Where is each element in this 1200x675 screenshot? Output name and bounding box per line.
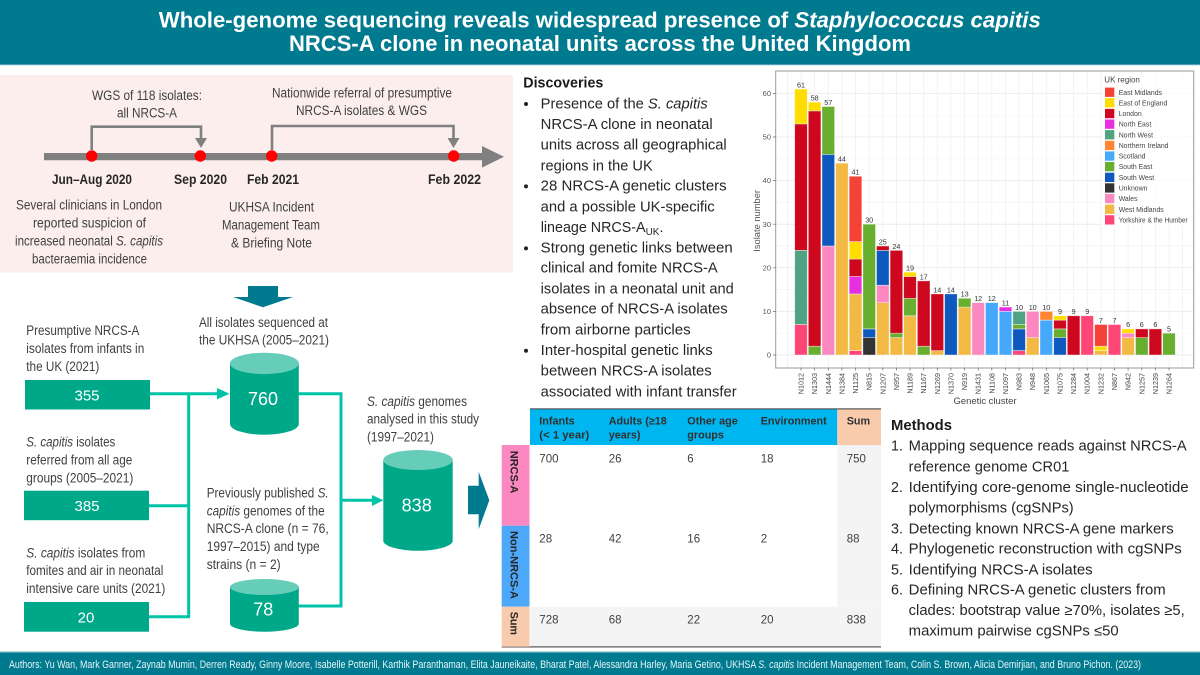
bullet: inter-hospital links: associated with infant transfer bbox=[541, 384, 737, 400]
x axis cluster labels: N1444 bbox=[824, 373, 833, 394]
table row: NRCS-A values: 750 bbox=[847, 453, 866, 465]
bar: N1444 bbox=[822, 106, 835, 355]
table row: Non-NRCS-A values: 28 bbox=[539, 534, 552, 546]
bullet: genetic clusters: 28 NRCS-A genetic clusters bbox=[541, 179, 727, 195]
bar: N1303 bbox=[808, 102, 821, 355]
bullet: presence across the UK bbox=[524, 96, 727, 174]
bullet: fomite links bbox=[524, 241, 734, 338]
text: WGS of 118 isolates: all NRCS-A bbox=[117, 106, 177, 121]
x axis cluster labels: N1384 bbox=[837, 373, 846, 394]
table header: Adults (≥18 bbox=[609, 416, 667, 428]
bar value labels: 25 bbox=[879, 237, 887, 246]
box: 355 isolates: 355 bbox=[74, 387, 100, 404]
bar: N1257 bbox=[1136, 329, 1148, 355]
bullet: genetic clusters bbox=[524, 179, 727, 238]
bar: N1264 bbox=[1163, 333, 1175, 355]
arrow: nationwide referral bracket bbox=[272, 126, 460, 150]
text: all isolates sequenced bbox=[199, 315, 329, 348]
legend: UK region: Yorkshire & the Humber bbox=[1119, 217, 1188, 224]
text: referred isolates: groups (2005–2021) bbox=[26, 470, 133, 485]
bar: N1004 bbox=[1081, 316, 1094, 355]
bar: N867 bbox=[1108, 324, 1121, 355]
table row: NRCS-A values: 26 bbox=[609, 453, 621, 465]
text: clinicians' suspicion: increased neonatal S. capitis bbox=[15, 233, 163, 248]
table row: Sum values: 838 bbox=[847, 614, 866, 626]
method step 5: Identifying NRCS-A isolates bbox=[909, 562, 1093, 578]
table header: years) bbox=[609, 429, 641, 441]
x axis cluster labels: N1125 bbox=[851, 373, 860, 394]
text: presumptive isolates bbox=[26, 323, 144, 374]
x axis title: Genetic cluster bbox=[954, 396, 1016, 407]
text: genomes analysed bbox=[367, 394, 479, 445]
title: Whole-genome sequencing reveals widespread presence of Staphylococcus capitis bbox=[159, 8, 1041, 32]
bar: N1065 bbox=[1040, 311, 1053, 355]
text: UKHSA incident team: & Briefing Note bbox=[231, 235, 312, 250]
panel: sample workflow bbox=[24, 315, 479, 632]
bullet: presence across the UK: Presence of the S. capitis bbox=[541, 96, 708, 112]
table row: Non-NRCS-A values bbox=[539, 534, 859, 546]
text: discoveries bbox=[523, 75, 737, 400]
method step 6: Defining NRCS-A genetic clusters from bbox=[909, 583, 1166, 599]
text: UKHSA incident team: UKHSA Incident bbox=[229, 200, 314, 215]
bar value labels: 41 bbox=[852, 168, 860, 177]
bullet: presence across the UK: regions in the UK bbox=[541, 158, 653, 174]
text: clinicians' suspicion bbox=[15, 197, 163, 266]
text: genomes analysed: analysed in this study bbox=[367, 412, 479, 427]
bar: N1384 bbox=[836, 163, 848, 355]
y axis title: Isolate number bbox=[752, 190, 762, 252]
table row: NRCS-A values: 18 bbox=[761, 453, 773, 465]
x axis cluster labels: N867 bbox=[1110, 373, 1119, 390]
legend: UK region: South West bbox=[1119, 175, 1154, 182]
bar: N815 bbox=[863, 224, 876, 355]
method step 3: 3. bbox=[891, 521, 903, 537]
table row: Non-NRCS-A values: 88 bbox=[847, 534, 859, 546]
text: previously published genomes: capitis genomes of the bbox=[207, 503, 325, 518]
footer: authors bbox=[0, 652, 1200, 675]
x axis cluster labels: N1108 bbox=[987, 373, 996, 394]
bar: N1075 bbox=[1054, 316, 1066, 355]
table row: Sum values: 20 bbox=[761, 614, 773, 626]
text: genomes analysed: (1997–2021) bbox=[367, 430, 434, 445]
bullet: fomite links: isolates in a neonatal unit and bbox=[541, 281, 734, 297]
bullet: inter-hospital links bbox=[524, 343, 737, 400]
bar value labels: 30 bbox=[865, 216, 873, 225]
bar: N1284 bbox=[1067, 316, 1080, 355]
x axis cluster labels: N1284 bbox=[1069, 373, 1078, 394]
x axis cluster labels: N1431 bbox=[974, 373, 983, 394]
legend: UK region: Northern Ireland bbox=[1119, 143, 1169, 150]
bullet: fomite links: from airborne particles bbox=[541, 322, 691, 338]
bar: N1125 bbox=[849, 176, 862, 355]
text: nationwide referral: Nationwide referral of presumptive bbox=[272, 85, 452, 100]
table header: (< 1 year) bbox=[539, 429, 590, 441]
x axis cluster labels: N1167 bbox=[919, 373, 928, 394]
panel: timeline bbox=[0, 75, 513, 272]
icon: database cylinder 760 bbox=[230, 353, 299, 435]
stacked bar chart bbox=[752, 71, 1194, 407]
bar: N1232 bbox=[1095, 324, 1107, 355]
bar value labels: 11 bbox=[1002, 298, 1009, 307]
bar value labels: 57 bbox=[824, 98, 832, 107]
bullet: presence across the UK: NRCS-A clone in neonatal bbox=[541, 117, 713, 133]
legend: UK region: North East bbox=[1119, 122, 1151, 129]
bar: N948 bbox=[1026, 311, 1039, 355]
bar value labels: 6 bbox=[1126, 320, 1130, 329]
method step 6 bbox=[891, 583, 1185, 640]
table row: Sum values: 22 bbox=[687, 614, 700, 626]
method step 2: Identifying core-genome single-nucleotide bbox=[909, 480, 1189, 496]
bar value labels: 6 bbox=[1153, 320, 1157, 329]
bars bbox=[795, 89, 1175, 355]
text: previously published genomes: Previously published S. bbox=[207, 485, 329, 500]
timeline event markers bbox=[86, 150, 459, 162]
icon: database cylinder 78: 78 bbox=[253, 600, 273, 620]
text: referred isolates bbox=[26, 435, 133, 485]
method step 6: maximum pairwise cgSNPs ≤50 bbox=[909, 624, 1119, 640]
bar: N1370 bbox=[945, 294, 957, 355]
text: fomite and air isolates: intensive care units (2021) bbox=[26, 581, 165, 596]
method step 2: polymorphisms (cgSNPs) bbox=[909, 501, 1074, 517]
bar: N1167 bbox=[917, 281, 930, 355]
x axis cluster labels: N919 bbox=[960, 373, 969, 390]
x axis cluster labels: N1012 bbox=[796, 373, 806, 394]
bar: N1189 bbox=[904, 272, 916, 355]
bar value labels: 12 bbox=[974, 294, 982, 303]
timeline date labels: Sep 2020 bbox=[174, 172, 227, 187]
row label: Non-NRCS-A: Non-NRCS-A bbox=[508, 531, 520, 599]
text: all isolates sequenced: the UKHSA (2005–2021) bbox=[199, 333, 329, 348]
y axis tick labels: 0 bbox=[767, 351, 771, 360]
text: referred isolates: referred from all age bbox=[26, 452, 132, 467]
table header: groups bbox=[687, 429, 724, 441]
table: isolates by source and lineage bbox=[502, 408, 881, 648]
bar: N983 bbox=[1013, 311, 1025, 355]
method step 4: 4. bbox=[891, 542, 903, 558]
table row: Non-NRCS-A values: 42 bbox=[609, 534, 621, 546]
x axis cluster labels: N1207 bbox=[878, 373, 887, 394]
text: nationwide referral bbox=[272, 85, 452, 118]
bar value labels: 44 bbox=[838, 155, 846, 164]
text: clinicians' suspicion: reported suspicion of bbox=[33, 215, 146, 230]
method step 2 bbox=[891, 480, 1189, 517]
table header: Infants bbox=[539, 416, 575, 428]
x axis cluster labels: N1269 bbox=[933, 373, 942, 394]
footer: authors: Authors: Yu Wan, Mark Ganner, Zaynab Mumin, Derren Ready, Ginny Moore, Isabelle Potterill, Karthik Paranthaman, Elita Jauneikaite, Bharat Patel, Alessandra Harley, Maria Getino, UKHSA S. capitis Incident Management Team, Colin S. Brown, Alicia Demirjian, and Bruno Pichon. (2023) bbox=[9, 659, 1141, 671]
x axis cluster labels: N1189 bbox=[906, 373, 914, 394]
row label: Sum: Sum bbox=[508, 612, 520, 635]
text: nationwide referral: NRCS-A isolates & WGS bbox=[296, 103, 427, 118]
y axis tick labels: 60 bbox=[763, 89, 771, 98]
bar value labels: 10 bbox=[1042, 303, 1050, 312]
x axis cluster labels: N1303 bbox=[810, 373, 819, 394]
box: 355 isolates bbox=[25, 380, 150, 410]
method step 4: Phylogenetic reconstruction with cgSNPs bbox=[909, 542, 1182, 558]
row label: Sum bbox=[502, 607, 530, 647]
bar: N1097 bbox=[999, 307, 1012, 355]
table header: Environment bbox=[761, 416, 827, 428]
x axis cluster labels: N948 bbox=[1028, 373, 1037, 390]
bar value labels: 9 bbox=[1058, 307, 1062, 316]
y axis tick labels: 30 bbox=[763, 220, 771, 229]
table row: Non-NRCS-A values: 16 bbox=[687, 534, 700, 546]
text: methods bbox=[891, 418, 1189, 640]
bar value labels: 17 bbox=[920, 272, 928, 281]
legend: UK region: London bbox=[1119, 111, 1142, 118]
x axis cluster labels: N1370 bbox=[946, 373, 955, 394]
row label: NRCS-A: NRCS-A bbox=[508, 451, 520, 494]
timeline date labels bbox=[52, 172, 481, 187]
icon: database cylinder 78 bbox=[230, 579, 299, 632]
method step 6: clades: bootstrap value ≥70%, isolates ≥5, bbox=[909, 603, 1185, 619]
legend: UK region: Scotland bbox=[1119, 154, 1146, 161]
bar value labels: 9 bbox=[1085, 307, 1089, 316]
bar: N1012 bbox=[795, 89, 807, 355]
bullet: genetic clusters: . bbox=[659, 220, 663, 236]
table row: NRCS-A values: 6 bbox=[687, 453, 694, 465]
legend: UK region: Wales bbox=[1119, 196, 1138, 203]
bar value labels: 5 bbox=[1167, 325, 1171, 334]
bullet: genetic clusters: UK bbox=[646, 227, 660, 238]
bar: N1108 bbox=[986, 303, 998, 355]
row label: Non-NRCS-A bbox=[502, 526, 530, 607]
bar: N1431 bbox=[972, 303, 984, 355]
arrow: workflow to table bbox=[468, 472, 489, 529]
box: 385 isolates: 385 bbox=[74, 498, 100, 515]
bullet: inter-hospital links: between NRCS-A isolates bbox=[541, 364, 712, 380]
table row: Sum values: 68 bbox=[609, 614, 621, 626]
text: previously published genomes: 1997–2015) and type bbox=[207, 539, 320, 554]
legend: UK region: UK region bbox=[1104, 76, 1140, 85]
table row: Sum values: 728 bbox=[539, 614, 558, 626]
connector lines bbox=[149, 388, 384, 617]
bar: N942 bbox=[1122, 329, 1134, 355]
arrow: WGS of 118 isolates bracket bbox=[92, 127, 207, 150]
legend: UK region: West Midlands bbox=[1119, 207, 1164, 214]
text: clinicians' suspicion: Several clinicians in London bbox=[16, 197, 162, 212]
bar value labels: 14 bbox=[933, 285, 941, 294]
box: 20 isolates bbox=[24, 602, 149, 632]
bar: N1269 bbox=[931, 294, 944, 355]
timeline date labels: Jun–Aug 2020 bbox=[52, 172, 132, 187]
text: previously published genomes: strains (n = 2) bbox=[207, 557, 281, 572]
x axis cluster labels: N1097 bbox=[1001, 373, 1010, 394]
x axis cluster labels: N1065 bbox=[1042, 373, 1051, 394]
text: presumptive isolates: the UK (2021) bbox=[26, 359, 99, 374]
method step 1: reference genome CR01 bbox=[909, 459, 1069, 475]
table header: Sum bbox=[847, 416, 870, 428]
x axis cluster labels: N1239 bbox=[1151, 373, 1160, 394]
table row: NRCS-A values bbox=[539, 453, 866, 465]
method step 3: Detecting known NRCS-A gene markers bbox=[909, 521, 1174, 537]
text: previously published genomes bbox=[207, 485, 329, 572]
x axis cluster labels: N1075 bbox=[1056, 373, 1064, 394]
method step 6: 6. bbox=[891, 583, 903, 599]
bar value labels: 19 bbox=[906, 264, 914, 273]
method step 5: 5. bbox=[891, 562, 903, 578]
text: WGS of 118 isolates bbox=[92, 88, 202, 121]
text: methods: Methods bbox=[891, 418, 952, 434]
bar value labels: 13 bbox=[961, 290, 969, 299]
method step 1: 1. bbox=[891, 439, 903, 455]
text: WGS of 118 isolates: WGS of 118 isolates: bbox=[92, 88, 202, 103]
timeline date labels: Feb 2021 bbox=[247, 172, 299, 187]
bar value labels: 61 bbox=[797, 80, 805, 89]
arrow: timeline axis bbox=[44, 146, 504, 168]
y axis tick labels: 50 bbox=[763, 133, 771, 142]
table header bbox=[539, 416, 870, 441]
table row: Non-NRCS-A values: 2 bbox=[761, 534, 767, 546]
bar value labels: 7 bbox=[1112, 316, 1116, 325]
bar value labels: 14 bbox=[947, 285, 955, 294]
text: presumptive isolates: Presumptive NRCS-A bbox=[26, 323, 139, 338]
icon: database cylinder 838: 838 bbox=[402, 496, 432, 516]
bullet: fomite links: absence of NRCS-A isolates bbox=[541, 302, 728, 318]
y axis tick labels: 20 bbox=[763, 263, 771, 272]
y axis tick labels: 40 bbox=[763, 176, 771, 185]
bar: N1239 bbox=[1149, 329, 1162, 355]
bullet: fomite links: clinical and fomite NRCS-A bbox=[541, 261, 718, 277]
legend: UK region: East of England bbox=[1119, 100, 1168, 107]
y axis tick labels: 10 bbox=[763, 307, 771, 316]
legend: UK region: Unknown bbox=[1119, 186, 1148, 192]
y axis tick labels bbox=[763, 89, 771, 360]
bar: N957 bbox=[890, 250, 903, 355]
table row: NRCS-A values: 700 bbox=[539, 453, 558, 465]
box: 385 isolates bbox=[24, 491, 149, 520]
table header: Other age bbox=[687, 416, 738, 428]
row label: NRCS-A bbox=[502, 445, 530, 526]
x axis cluster labels: N957 bbox=[892, 373, 901, 390]
bar value labels: 7 bbox=[1099, 316, 1103, 325]
text: genomes analysed: S. capitis genomes bbox=[367, 394, 467, 409]
table row: Sum values bbox=[539, 614, 866, 626]
bar value labels bbox=[797, 80, 1171, 334]
bullet: inter-hospital links: Inter-hospital genetic links bbox=[541, 343, 713, 359]
timeline date labels: Feb 2022 bbox=[428, 172, 481, 187]
text: discoveries: Discoveries bbox=[523, 75, 603, 91]
title: NRCS-A clone in neonatal units across the United Kingdom bbox=[289, 31, 911, 56]
text: fomite and air isolates bbox=[26, 545, 165, 596]
chart frame bbox=[776, 71, 1194, 368]
text: referred isolates: S. capitis isolates bbox=[26, 435, 116, 450]
bar value labels: 9 bbox=[1072, 307, 1076, 316]
x axis cluster labels bbox=[796, 373, 1174, 394]
text: UKHSA incident team bbox=[222, 200, 320, 250]
legend: UK region: East Midlands bbox=[1119, 90, 1163, 97]
text: previously published genomes: NRCS-A clone (n = 76, bbox=[207, 521, 329, 536]
bar: N919 bbox=[958, 298, 971, 355]
x axis cluster labels: N1004 bbox=[1083, 373, 1092, 394]
bullet: presence across the UK: units across all geographical bbox=[541, 138, 727, 154]
legend: UK region bbox=[1102, 73, 1192, 226]
bar: N1207 bbox=[876, 246, 889, 355]
text: fomite and air isolates: S. capitis isolates from bbox=[26, 545, 145, 560]
icon: database cylinder 760: 760 bbox=[248, 389, 278, 409]
bar value labels: 10 bbox=[1029, 303, 1037, 312]
legend: UK region: North West bbox=[1119, 132, 1153, 139]
method step 1 bbox=[891, 439, 1187, 475]
text: presumptive isolates: isolates from infants in bbox=[26, 341, 144, 356]
x axis cluster labels: N1264 bbox=[1164, 373, 1174, 394]
text: UKHSA incident team: Management Team bbox=[222, 217, 320, 232]
icon: database cylinder 838 bbox=[383, 450, 453, 551]
text: all isolates sequenced: All isolates sequenced at bbox=[199, 315, 328, 330]
method step 2: 2. bbox=[891, 480, 903, 496]
text: clinicians' suspicion: bacteraemia incidence bbox=[32, 251, 147, 266]
method step 1: Mapping sequence reads against NRCS-A bbox=[909, 439, 1187, 455]
x axis cluster labels: N983 bbox=[1015, 373, 1024, 390]
x axis cluster labels: N1257 bbox=[1137, 373, 1146, 394]
x axis cluster labels: N1232 bbox=[1096, 373, 1105, 394]
arrow: timeline to workflow bbox=[233, 286, 293, 307]
bar value labels: 24 bbox=[892, 242, 900, 251]
bar value labels: 58 bbox=[811, 94, 819, 102]
bar value labels: 12 bbox=[988, 294, 996, 303]
bullet: genetic clusters: and a possible UK-specific bbox=[541, 199, 715, 215]
text: fomite and air isolates: fomites and air in neonatal bbox=[26, 563, 163, 578]
x axis cluster labels: N815 bbox=[865, 373, 874, 390]
box: 20 isolates: 20 bbox=[78, 609, 94, 626]
bar value labels: 6 bbox=[1140, 320, 1144, 329]
title bbox=[0, 0, 1200, 65]
x axis cluster labels: N942 bbox=[1124, 373, 1133, 390]
bullet: fomite links: Strong genetic links between bbox=[541, 241, 733, 257]
legend: UK region: South East bbox=[1119, 164, 1152, 171]
bar value labels: 10 bbox=[1015, 303, 1023, 312]
bullet: genetic clusters: lineage NRCS-A bbox=[541, 220, 646, 236]
